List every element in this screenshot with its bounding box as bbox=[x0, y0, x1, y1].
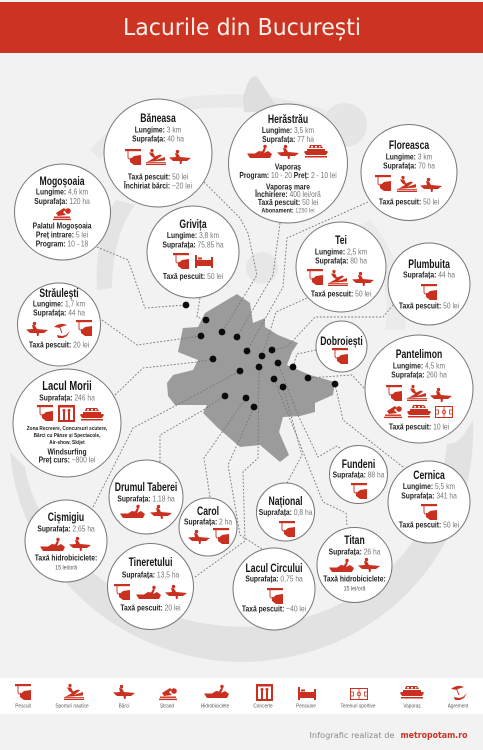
panel: Herăstrău: Abonament: 1250 lei bbox=[261, 207, 315, 215]
legend: Bărci bbox=[113, 685, 135, 710]
panel: Tei: Tei bbox=[335, 235, 347, 247]
panel: Băneasa: Taxă pescuit: 50 lei bbox=[128, 172, 188, 182]
panel: Băneasa: Închiriat bărci: ~20 lei bbox=[123, 181, 192, 191]
panel: Carol bbox=[179, 498, 237, 556]
panel: Străulești bbox=[18, 283, 100, 366]
lake location dots bbox=[183, 302, 338, 410]
panel: Mogoșoaia: Suprafața: 120 ha bbox=[34, 196, 91, 206]
panel: Grivița: Lungime: 3,8 km bbox=[167, 230, 219, 240]
panel: Herăstrău: Taxă pescuit: 50 lei bbox=[258, 197, 318, 207]
panel: Tei: Lungime: 2,5 km bbox=[315, 247, 367, 257]
legend: Sporturi nautice: Sporturi nautice bbox=[55, 703, 89, 710]
panel: Herăstrău: Herăstrău bbox=[268, 114, 308, 126]
panel: Grivița bbox=[147, 206, 239, 298]
panel: Cișmigiu: Taxă hidrobiciclete: bbox=[35, 553, 97, 563]
panel: Titan: Taxă hidrobiciclete: bbox=[323, 574, 386, 584]
legend: Hidrobiciclete: Hidrobiciclete bbox=[201, 703, 229, 710]
panel: Cernica bbox=[388, 461, 470, 543]
panel: Băneasa: Lungime: 3 km bbox=[135, 125, 181, 135]
panel: Titan: Titan bbox=[344, 535, 365, 547]
panel: Carol: Suprafața: 2 ha bbox=[184, 517, 233, 527]
panel: Pantelimon: Pantelimon bbox=[396, 349, 442, 361]
panel: Herăstrău: Închiriere: 400 lei/oră bbox=[254, 189, 322, 199]
panel: Titan: 15 lei/oră bbox=[344, 586, 366, 593]
panel: Național: Național bbox=[269, 496, 303, 508]
panel: Fundeni bbox=[330, 446, 388, 504]
panel: Mogoșoaia: Palatul Mogoșoaia bbox=[33, 221, 92, 231]
legend: Agrement: Agrement bbox=[448, 703, 469, 710]
panel: Dobroiești bbox=[316, 321, 367, 372]
panel: Plumbuita: Taxă pescuit: 50 lei bbox=[399, 301, 459, 311]
panel: Tineretului: Taxă pescuit: 20 lei bbox=[120, 603, 181, 613]
panel: Floreasca: Taxă pescuit: 50 lei bbox=[379, 197, 439, 207]
panel: Lacul Morii: Windsurfing bbox=[48, 447, 87, 457]
panel: Dobroiești: Dobroiești bbox=[320, 336, 363, 348]
panel: Floreasca: Floreasca bbox=[389, 140, 429, 152]
panel: Lacul Morii: Zona Recreere, Concursuri scutere, bbox=[27, 426, 108, 432]
panel: Mogoșoaia: Mogoșoaia bbox=[40, 176, 85, 188]
panel: Drumul Taberei bbox=[109, 460, 183, 534]
legend: Ștrand: Ștrand bbox=[160, 703, 174, 710]
legend strip bbox=[0, 678, 483, 714]
legend: Agrement bbox=[448, 686, 469, 710]
legend: Pensiune: Pensiune bbox=[296, 703, 316, 710]
panel: Lacul Circului bbox=[233, 548, 315, 630]
panel: Lacul Circului: Taxă pescuit: ~40 lei bbox=[242, 604, 306, 614]
panel: Național: Suprafața: 0,8 ha bbox=[259, 507, 313, 517]
legend: Terenuri sportive bbox=[340, 688, 376, 710]
panel: Plumbuita bbox=[388, 243, 470, 325]
panel: Herăstrău: Vaporaș bbox=[275, 162, 301, 172]
panel: Tineretului: Tineretului bbox=[129, 557, 173, 569]
panel: Băneasa bbox=[104, 99, 212, 207]
credit bbox=[310, 731, 468, 741]
panel: Cișmigiu bbox=[25, 500, 107, 582]
credit: Infografic realizat de bbox=[310, 731, 395, 740]
panel: Mogoșoaia bbox=[14, 164, 110, 260]
panel: Floreasca: Suprafața: 70 ha bbox=[383, 161, 436, 171]
panel: Tineretului bbox=[108, 544, 194, 630]
panel: Pantelimon: Lungime: 4,5 km bbox=[393, 361, 445, 371]
legend: Sporturi nautice bbox=[55, 684, 89, 710]
panel: Floreasca: Lungime: 3 km bbox=[386, 152, 432, 162]
map of Bucharest bbox=[167, 294, 335, 462]
panel: Național bbox=[256, 483, 314, 541]
panel: Plumbuita: Plumbuita bbox=[408, 259, 450, 271]
panel: Plumbuita: Suprafața: 44 ha bbox=[403, 270, 456, 280]
panel: Străulești: Lungime: 1,7 km bbox=[33, 299, 85, 309]
legend: Concerte: Concerte bbox=[253, 703, 273, 710]
legend: Bărci: Bărci bbox=[119, 703, 129, 710]
panel: Pantelimon bbox=[365, 335, 473, 443]
panel: Titan: Suprafața: 26 ha bbox=[329, 547, 381, 557]
panel: Grivița: Grivița bbox=[179, 219, 207, 231]
legend: Vaporaș bbox=[400, 686, 424, 710]
panel: Lacul Morii: Air-show, Skijet bbox=[49, 440, 85, 446]
panel: Băneasa: Suprafața: 40 ha bbox=[132, 134, 185, 144]
panel: Mogoșoaia: Lungime: 4,6 km bbox=[36, 187, 88, 197]
legend: Pescuit: Pescuit bbox=[15, 703, 31, 710]
panel: Titan bbox=[317, 528, 392, 602]
legend: Vaporaș: Vaporaș bbox=[403, 703, 421, 710]
legend: Terenuri sportive: Terenuri sportive bbox=[340, 703, 376, 710]
legend: Ștrand bbox=[159, 688, 177, 710]
panel: Pantelimon: Suprafața: 260 ha bbox=[391, 370, 448, 380]
panel: Pantelimon: Taxă pescuit: 10 lei bbox=[389, 422, 449, 432]
panel: Herăstrău: Suprafața: 77 ha bbox=[262, 134, 315, 144]
panel: Lacul Morii: Preț curs: ~800 lei bbox=[39, 455, 96, 465]
panel: Grivița: Suprafața: 75,85 ha bbox=[162, 240, 224, 250]
panel: Cernica: Taxă pescuit: 50 lei bbox=[399, 520, 459, 530]
panel: Lacul Morii: Suprafața: 246 ha bbox=[39, 393, 96, 403]
legend: Hidrobiciclete bbox=[201, 685, 229, 710]
panel: Cernica: Suprafața: 341 ha bbox=[401, 491, 458, 501]
panel: Străulești: Taxă pescuit: 20 lei bbox=[29, 340, 89, 350]
panel: Băneasa: Băneasa bbox=[140, 113, 176, 125]
credit: metropotam.ro bbox=[400, 731, 468, 741]
panel: Străulești: Străulești bbox=[39, 288, 79, 300]
panel: Drumul Taberei: Suprafața: 1,18 ha bbox=[117, 494, 176, 504]
panel: Herăstrău: Vaporaș mare bbox=[266, 182, 310, 192]
panel: Floreasca bbox=[361, 124, 457, 220]
legend: Concerte bbox=[253, 684, 273, 710]
connector lines bbox=[93, 182, 403, 577]
panel: Tei: Suprafața: 80 ha bbox=[315, 256, 368, 266]
panel: Cernica: Cernica bbox=[413, 470, 445, 482]
panel: Lacul Morii: Lacul Morii bbox=[42, 380, 92, 393]
panel: Drumul Taberei: Drumul Taberei bbox=[115, 482, 177, 494]
header band bbox=[0, 2, 483, 53]
panel: Tei bbox=[296, 222, 386, 312]
panel: Străulești: Suprafața: 44 ha bbox=[33, 308, 86, 318]
panel: Lacul Circului: Lacul Circului bbox=[246, 563, 303, 575]
legend: Pescuit bbox=[15, 684, 31, 710]
panel: Mogoșoaia: Program: 10 - 18 bbox=[36, 239, 88, 249]
panel: Tineretului: Suprafața: 13,5 ha bbox=[122, 570, 180, 580]
panel: Grivița: Taxă pescuit: 50 lei bbox=[163, 271, 223, 281]
background swirl bbox=[10, 76, 473, 662]
panel: Cernica: Lungime: 5,5 km bbox=[403, 481, 455, 491]
panel: Herăstrău: Program: 10 - 20 Preț: 2 - 10 lei bbox=[239, 170, 337, 180]
panel: Cișmigiu: 15 lei/oră bbox=[55, 565, 78, 572]
panel: Herăstrău bbox=[228, 104, 348, 223]
panel: Fundeni: Fundeni bbox=[342, 459, 375, 471]
legend: Pensiune bbox=[296, 687, 316, 710]
title: Lacurile din București bbox=[123, 15, 361, 41]
panel: Mogoșoaia: Preț intrare: 5 lei bbox=[36, 230, 88, 240]
panel: Fundeni: Suprafața: 88 ha bbox=[333, 470, 385, 480]
panel: Lacul Morii: Bărci cu Pânze și Spectacole, bbox=[34, 433, 101, 439]
panel: Herăstrău: Lungime: 3,5 km bbox=[262, 125, 314, 135]
panel: Cișmigiu: Cișmigiu bbox=[48, 512, 84, 524]
panel: Carol: Carol bbox=[197, 506, 219, 518]
panel: Cișmigiu: Suprafața: 2,65 ha bbox=[37, 524, 96, 534]
panel: Tei: Taxă pescuit: 50 lei bbox=[311, 289, 371, 299]
panel: Lacul Circului: Suprafața: 0,75 ha bbox=[245, 574, 304, 584]
panel: Lacul Morii bbox=[13, 369, 121, 477]
